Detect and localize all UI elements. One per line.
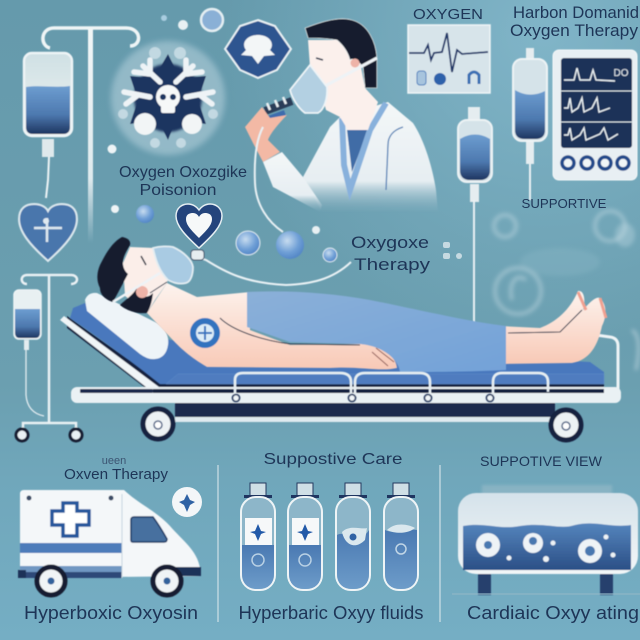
doctor's hair (305, 19, 377, 88)
mask strap (325, 58, 377, 86)
heading: OXYGEN: OXYGEN (413, 6, 483, 23)
mattress underside (67, 316, 604, 393)
doctor with oxygen mask (245, 19, 438, 232)
label: Oxygoxe Therapy: Oxygoxe (351, 233, 429, 252)
patient monitor: DO (614, 68, 629, 79)
hand (245, 107, 287, 162)
closed eye (141, 256, 146, 265)
shoulder badge (190, 318, 220, 348)
mattress (70, 303, 604, 384)
patient lying down (97, 237, 606, 372)
small dots beside label (443, 242, 462, 259)
oxygen tube (255, 127, 283, 232)
IV bag, upper left (24, 53, 72, 198)
vial 4 (384, 483, 418, 590)
ground shadow (452, 593, 640, 595)
vial 1 (241, 483, 275, 590)
coat collar and shirt (342, 103, 403, 190)
small heading: Oxven Therapy: Oxven Therapy (64, 466, 169, 483)
blanket (247, 291, 506, 372)
heading: Harbon Domanid Oxygen Therapy: Harbon Domanid (513, 3, 639, 22)
pillow (85, 293, 168, 359)
IV bag, center with long tube (458, 107, 492, 338)
heading: Harbon Domanid Oxygen Therapy (510, 3, 639, 40)
round cross icon (172, 487, 202, 517)
patient's hair and beard (97, 237, 153, 313)
wheels (143, 409, 581, 440)
patient's mask (153, 246, 193, 284)
heading: Suppostive Care: Suppostive Care (264, 451, 403, 468)
sleeve (263, 152, 322, 212)
ECG panel (408, 25, 490, 93)
label: Oxygoxe Therapy (351, 233, 431, 274)
label: Oxygoxe Therapy: Therapy (354, 255, 431, 274)
patient's legs and feet (500, 291, 606, 364)
IV stand, upper left (24, 28, 139, 243)
heading: Harbon Domanid Oxygen Therapy: Oxygen Therapy (510, 21, 639, 40)
inhaler (265, 101, 292, 111)
stretcher bed (60, 293, 621, 440)
bed side rails (232, 373, 548, 402)
heading: Supportive View: SUPPOTIVE VIEW (480, 453, 603, 469)
caption: Cardiaic Oxyy ating: Cardiaic Oxyy ating (467, 603, 639, 623)
patient's head (123, 247, 170, 313)
frame bar (71, 387, 621, 403)
section dividers (218, 465, 440, 622)
small heading: Oxven Therapy (64, 455, 169, 483)
caption: Hyperbaric Oxyy fluids: Hyperbaric Oxyy fluids (238, 603, 424, 623)
backrest frame (60, 316, 163, 394)
patient's body and arm (147, 283, 397, 369)
patient's hand lines (372, 348, 394, 366)
snowflake skull emblem (111, 41, 225, 155)
title: Oxygen Oxozyke Poisonion: Poisonion (140, 182, 216, 199)
ambulance (18, 490, 201, 595)
doctor's face and neck (308, 40, 378, 130)
vial 3 (336, 483, 370, 590)
patient monitor (553, 50, 637, 180)
tank (458, 485, 638, 595)
undercarriage (175, 403, 555, 418)
title: Oxygen Oxozyke Poisonion: Oxygen Oxozgike (119, 164, 247, 181)
section: fluid vials (238, 451, 424, 623)
IV bag, upper right (513, 48, 547, 200)
caption: Hyperboxic Oxyosin: Hyperboxic Oxyosin (24, 603, 198, 623)
skull badge (225, 20, 291, 78)
mask strap and ear (113, 273, 167, 302)
skull (156, 85, 180, 113)
face mask (290, 65, 327, 113)
title: Oxygen Oxozyke Poisonion (119, 164, 247, 199)
doctor's white coat (303, 102, 438, 212)
heading: SUPPORTIVE: SUPPORTIVE (522, 196, 607, 211)
IV stand, lower left (14, 275, 82, 441)
foot rail (596, 335, 618, 392)
section: hyperbaric tank (452, 453, 640, 623)
section: ambulance (18, 455, 202, 623)
ghost bubbles, right (494, 211, 639, 370)
small heading: Oxven Therapy: ueen (102, 455, 126, 467)
mask tube (192, 255, 351, 285)
vial 2 (288, 483, 322, 590)
floating bubbles (108, 9, 337, 262)
heart icon, dark navy (176, 204, 222, 248)
heart icon, blue with figure (19, 204, 77, 261)
